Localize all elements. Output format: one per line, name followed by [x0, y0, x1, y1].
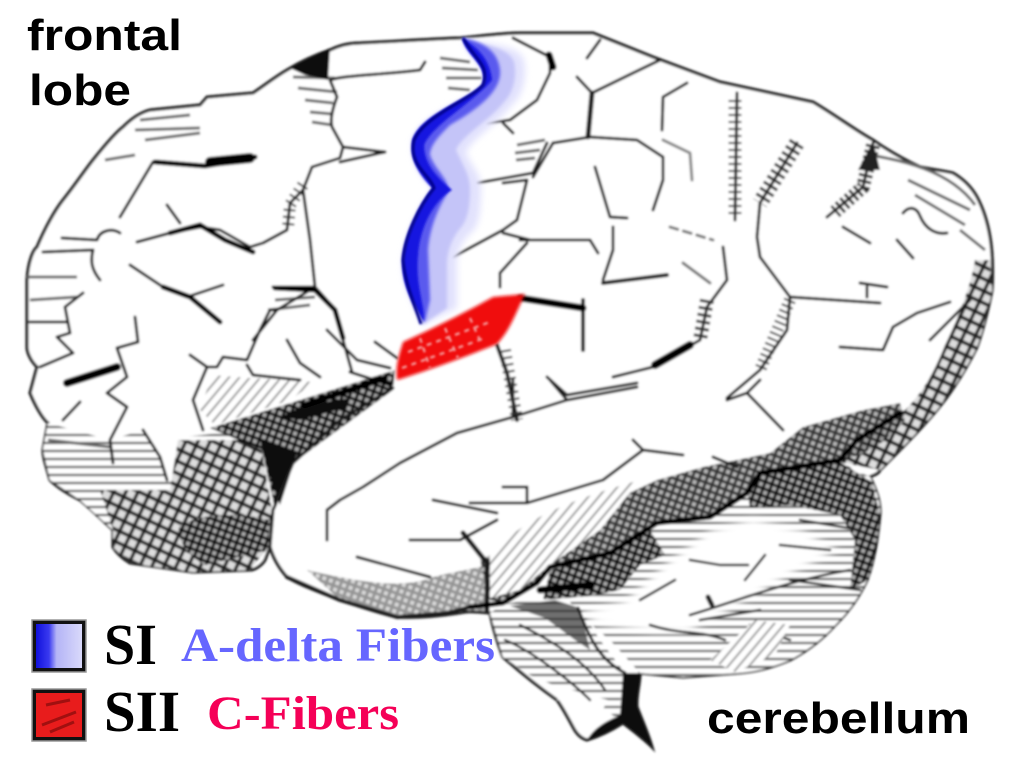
dense dark accents [67, 55, 690, 590]
label: frontal lobe: lobe [29, 66, 131, 115]
cross-hatched frontal-temporal junction [100, 440, 272, 572]
SII region: red patch [397, 294, 525, 380]
light blue band [403, 38, 515, 325]
label: cerebellum: cerebellum [707, 694, 970, 743]
brainstem strokes [505, 640, 590, 700]
legend swatch: SI [32, 620, 86, 672]
legend label: SI: SI [104, 612, 157, 677]
dark blue edge [403, 38, 485, 324]
saturated blue band [403, 38, 492, 322]
brainstem black wedge [587, 673, 652, 747]
cerebellum light hatch [710, 620, 790, 672]
label: frontal lobe: frontal [27, 11, 182, 60]
Sylvian fissure and temporal upper edge [270, 388, 393, 547]
pale outer band [403, 38, 525, 325]
cerebellum dark upper area [748, 462, 880, 590]
top-edge hatches [27, 58, 985, 447]
cerebellum dark band [543, 530, 665, 600]
cerebellum [543, 462, 880, 677]
frontal lobe folds [330, 62, 425, 80]
cross-hatched occipital edge [838, 260, 992, 470]
light hatching above fissure [200, 375, 315, 425]
temporal-cerebellar sulcus [470, 413, 900, 607]
brainstem [490, 598, 652, 747]
cerebellum inner strokes [640, 520, 860, 640]
dark hatched band along Sylvian fissure [210, 370, 395, 510]
parietal and occipital [735, 93, 737, 220]
central region [487, 38, 550, 123]
upper temporal cross-hatched band [480, 403, 905, 603]
legend label: C-Fibers: C-Fibers [207, 687, 399, 740]
sulci lines [30, 38, 970, 700]
SI region: blue gradient [403, 38, 525, 325]
temporal lobe folds [327, 387, 637, 540]
light hatch on temporal lobe [490, 480, 640, 598]
horizontal hatching: frontal base [43, 423, 272, 572]
legend [32, 612, 495, 744]
black fissure wedge [260, 440, 297, 505]
legend label: SII: SII [104, 679, 180, 744]
label: frontal lobe [27, 11, 182, 115]
legend swatch: SII [32, 689, 86, 741]
cerebellum white centre [577, 518, 840, 633]
comb-like sulcus hatching [288, 100, 873, 420]
legend label: A-delta Fibers: A-delta Fibers [181, 619, 495, 672]
dark top-edge wedge [290, 48, 330, 80]
mid blue band [403, 38, 500, 322]
